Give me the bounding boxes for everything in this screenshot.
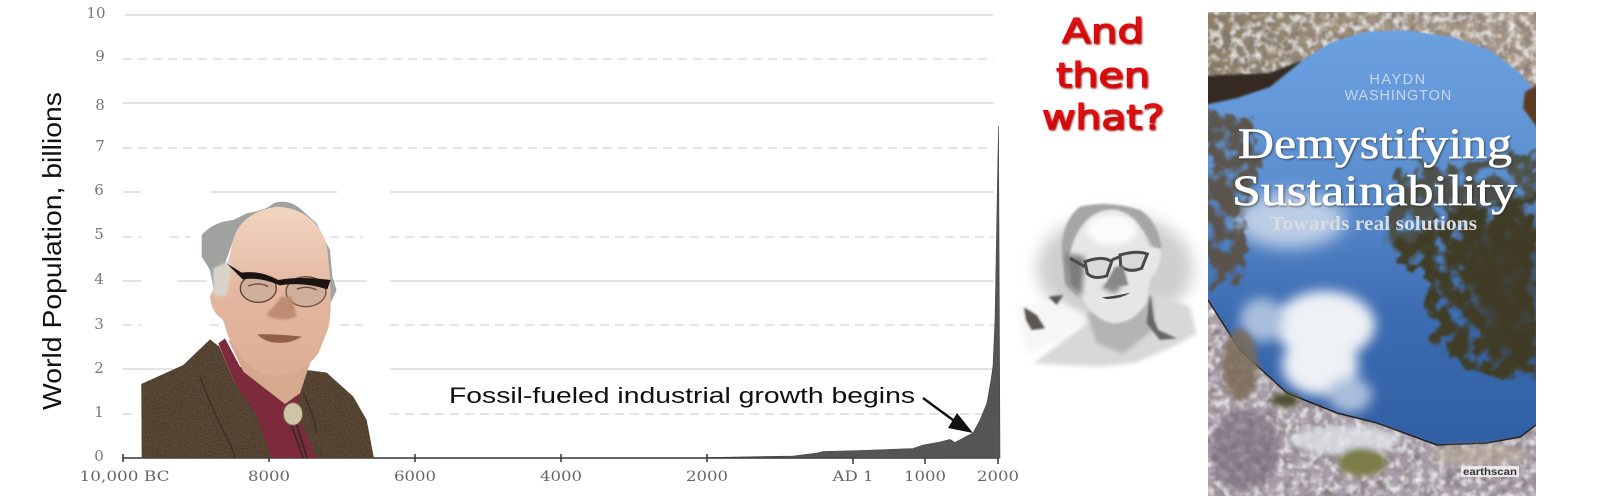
glasses brow bar <box>227 263 331 289</box>
annotation: fossil-fueled growth: Fossil-fueled industrial growth begins <box>449 383 915 408</box>
population area curve <box>707 126 1000 458</box>
cloud upper left <box>1235 192 1345 248</box>
population chart <box>80 4 1019 485</box>
y axis labels: 5 <box>94 225 104 243</box>
nose shadow <box>267 297 297 320</box>
main cloud <box>1240 291 1375 413</box>
collar shadow <box>1147 293 1177 340</box>
shirt <box>218 338 317 458</box>
x axis labels <box>80 469 1019 485</box>
author name: WASHINGTON <box>1344 88 1452 104</box>
y axis labels: 1 <box>94 403 104 421</box>
brown rock right <box>1522 84 1536 129</box>
lapel shadows <box>200 377 317 458</box>
jacket <box>141 339 374 458</box>
tree solid core <box>1460 215 1536 365</box>
mouth <box>1102 293 1131 299</box>
heading: And then what?: what? <box>1042 98 1164 138</box>
x axis labels: 4000 <box>540 469 582 485</box>
heading: And then what?: then <box>1056 56 1150 96</box>
book title: Demystifying <box>1238 121 1512 168</box>
face shading <box>1065 253 1123 297</box>
nose <box>1103 267 1128 288</box>
shirt <box>1033 293 1197 367</box>
neck <box>1087 297 1153 353</box>
grey vignette <box>1037 213 1193 323</box>
horizontal grid lines <box>123 15 994 414</box>
hand shadow <box>1024 295 1063 330</box>
x axis labels: 2000 <box>686 469 728 485</box>
forehead highlight <box>1087 215 1137 245</box>
portrait: man with glasses, vignette <box>1017 204 1197 367</box>
head <box>210 207 331 376</box>
y axis labels: 7 <box>95 137 105 155</box>
rock top <box>1208 12 1536 88</box>
author name: HAYDN <box>1369 72 1427 88</box>
author name <box>1344 74 1450 100</box>
x axis line and ticks <box>123 454 999 464</box>
bolo tie <box>283 403 303 425</box>
y axis labels: 10 <box>86 4 106 22</box>
y axis labels <box>86 4 106 465</box>
x axis labels: 6000 <box>394 469 436 485</box>
x axis labels: 8000 <box>248 469 290 485</box>
publisher logo: earthscan <box>1463 467 1517 478</box>
tree reflection right <box>1390 195 1536 378</box>
y axis labels: 0 <box>94 447 104 465</box>
lenses <box>240 274 276 302</box>
heading: And then what? <box>1042 12 1164 138</box>
eyes <box>248 284 317 290</box>
face <box>1068 209 1161 323</box>
y axis labels: 3 <box>94 315 104 333</box>
dark rock shadow <box>1200 60 1303 106</box>
lit rock and tan patches <box>1211 329 1530 490</box>
y axis labels: 8 <box>95 96 105 114</box>
rock edge shading <box>1208 300 1536 445</box>
portrait: man in tweed jacket <box>141 202 374 458</box>
tree reflection left <box>1208 105 1262 290</box>
hair <box>1062 204 1162 297</box>
book title: Sustainability <box>1232 168 1518 215</box>
x axis labels: 2000 <box>977 469 1019 485</box>
heading: And then what?: And <box>1062 12 1144 52</box>
tree reflection upper right <box>1385 150 1536 260</box>
sky reflection <box>1208 29 1536 446</box>
hair <box>202 202 337 312</box>
book subtitle: Towards real solutions <box>1270 214 1477 235</box>
white hand area <box>1017 300 1087 353</box>
x axis labels: 10,000 BC <box>80 469 170 485</box>
temple hair <box>213 260 232 297</box>
x axis labels: 1000 <box>904 469 946 485</box>
x axis labels: AD 1 <box>831 469 874 485</box>
y axis labels: 6 <box>94 181 104 199</box>
neck <box>228 340 313 404</box>
rock bottom <box>1208 298 1536 496</box>
y axis labels: 2 <box>94 359 104 377</box>
book cover <box>1200 4 1546 500</box>
book title <box>1232 121 1518 215</box>
mouth <box>257 334 302 343</box>
glasses <box>1070 252 1147 277</box>
y axis labels: 9 <box>95 47 105 65</box>
arrow to curve <box>923 398 973 433</box>
y axis title: World Population, billions <box>37 92 67 410</box>
y axis labels: 4 <box>94 270 104 288</box>
